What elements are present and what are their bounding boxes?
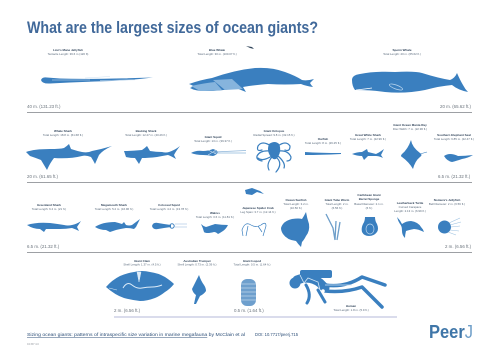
great white shark: Total Length: 7 m. (22.96 ft.) <box>350 137 386 141</box>
scale label: 0.5 m: 0.5 m. (1.64 ft.) <box>234 308 264 313</box>
row 1: largest animals <box>27 46 472 109</box>
giant clam <box>106 259 174 301</box>
southern elephant seal: Total Length: 6.85 m. (22.47 ft.) <box>434 137 474 141</box>
giant squid: Giant Squid <box>205 135 222 139</box>
megamouth shark: Total Length: 5.2 m. (16.96 ft.) <box>95 207 133 211</box>
giant tube worm <box>325 198 350 240</box>
lion's mane jellyfish: Lion's Mane Jellyfish <box>53 48 83 52</box>
leatherback turtle: Leatherback Turtle <box>397 201 424 205</box>
giant isopod <box>234 259 271 306</box>
caribbean giant barrel sponge: Caribbean Giant <box>357 193 381 197</box>
australian trumpet: Australian Trumpet <box>183 259 211 263</box>
southern elephant seal <box>434 133 474 162</box>
giant squid: Total Length: 13 m. (39.37 ft.) <box>194 139 232 143</box>
caribbean giant barrel sponge: (6 ft.) <box>366 206 372 210</box>
blue whale <box>189 46 314 92</box>
giant tube worm: Giant Tube Worm <box>325 198 350 202</box>
lion's mane jellyfish: Tentacle Length: 36.6 m (120 ft) <box>48 52 88 56</box>
giant isopod: Giant Isopod <box>243 259 261 263</box>
row 4 <box>106 259 385 313</box>
caribbean giant barrel sponge: Barrel Sponge <box>359 197 380 201</box>
sperm whale <box>352 48 468 93</box>
japanese spider crab: Japanese Spider Crab <box>242 206 274 210</box>
scale line 1 <box>27 111 472 114</box>
head <box>290 278 300 288</box>
leatherback turtle: Curved Carapace <box>399 205 422 209</box>
nomura's jellyfish <box>429 198 465 235</box>
australian trumpet <box>178 259 216 304</box>
spider crab scale diver <box>245 188 264 195</box>
giant octopus <box>253 129 295 172</box>
caribbean giant barrel sponge <box>354 193 384 236</box>
oarfish: Total Length: 8 m. (26.25 ft.) <box>305 141 341 145</box>
sperm whale: Total Length: 20 m. (65.62 ft.) <box>383 52 421 56</box>
human diver <box>290 270 385 312</box>
australian trumpet: Shell Length: 0.73 m. (2.39 ft.) <box>178 262 216 266</box>
great white shark: Great White Shark <box>355 133 381 137</box>
whale shark: Total Length: 18.8 m. (61.68 ft.) <box>43 133 83 137</box>
row 3 <box>27 188 472 249</box>
leatherback turtle: Length: 2.13 m. (6.99 ft.) <box>394 209 426 213</box>
oarfish: Oarfish <box>318 137 328 141</box>
scale line 3 <box>27 251 472 254</box>
giant ocean manta ray <box>393 123 427 169</box>
blue whale: Total Length: 30 m. (100.07 ft.) <box>197 52 237 56</box>
colossal squid: Colossal Squid <box>158 203 180 207</box>
scale label: 6.5 m left: 6.5 m. (21.32 ft.) <box>27 244 60 249</box>
sperm whale: Sperm Whale <box>392 48 412 52</box>
footnote: CC BY 4.0 <box>27 343 39 346</box>
ocean sunfish: Total Length: 3.2 m. <box>283 202 309 206</box>
tank <box>300 270 332 278</box>
walrus: Total Length: 3.6 m. (11.81 ft.) <box>196 215 234 219</box>
japanese spider crab <box>240 188 276 236</box>
leatherback turtle <box>394 201 426 238</box>
ocean sunfish: (10.50 ft.) <box>290 206 302 210</box>
walrus <box>196 211 234 234</box>
greenland shark: Greenland Shark <box>37 203 61 207</box>
basking shark: Total Length: 12.27 m. (40.26 ft.) <box>125 133 167 137</box>
colossal squid: Total Length: 4.2 m. (13.78 ft.) <box>150 207 188 211</box>
giant ocean manta ray: Giant Ocean Manta Ray <box>393 123 427 127</box>
nomura's jellyfish: Bell Diameter: 2 m. (6.56 ft.) <box>429 202 465 206</box>
megamouth shark <box>95 203 140 232</box>
scale label: 2 m right: 2 m. (6.56 ft.) <box>445 244 472 249</box>
whale shark: Whale Shark <box>54 129 72 133</box>
japanese spider crab: Leg Span: 3.7 m. (12.14 ft.) <box>240 210 276 214</box>
giant clam: Shell Length: 1.37 m. (4.5 ft.) <box>123 262 161 266</box>
giant clam: Giant Clam <box>134 259 150 263</box>
greenland shark: Total Length: 6.4 m. (21 ft.) <box>32 207 66 211</box>
scale label: 2 m: 2 m. (6.56 ft.) <box>114 308 141 313</box>
title: What are the largest sizes of ocean giants? <box>27 18 318 37</box>
giant isopod: Total Length: 0.5 m. (1.64 ft.) <box>234 262 271 266</box>
row 2 <box>26 123 474 179</box>
limbs and torso <box>297 278 325 288</box>
giant tube worm: (6.56 ft.) <box>332 206 342 210</box>
great white shark <box>350 133 386 160</box>
PeerJ logo: PeerJ <box>429 322 473 342</box>
scale label: 20 m right: 20 m. (65.62 ft.) <box>440 104 472 109</box>
citation: Sizing ocean giants: patterns of intraspecific size variation in marine megafauna by McClain et al <box>27 332 245 338</box>
scale line 4 <box>114 316 397 318</box>
scale line 2 <box>27 181 472 184</box>
whale shark <box>26 129 112 170</box>
ocean sunfish <box>281 198 309 247</box>
blue whale: Blue Whale <box>209 48 225 52</box>
small diver scale icon <box>246 46 254 49</box>
megamouth shark: Megamouth Shark <box>101 203 127 207</box>
citation <box>27 332 298 338</box>
basking shark: Basking Shark <box>136 129 157 133</box>
nomura's jellyfish: Nomura's Jellyfish <box>434 198 460 202</box>
southern elephant seal: Southern Elephant Seal <box>437 133 471 137</box>
caribbean giant barrel sponge: Basal Diameter: 2.1 m. <box>354 202 384 206</box>
scale label: 20 m left: 20 m. (61.65 ft.) <box>27 174 59 179</box>
giant octopus: Radial Spread: 9.8 m. (32.15 ft.) <box>253 133 295 137</box>
oarfish <box>305 137 341 155</box>
giant tube worm: Total Length: 2 m. <box>326 202 349 206</box>
human diver: Total Length: 1.8 m. (5.9 ft.) <box>333 308 369 312</box>
scale label: 6.5 m right: 6.5 m. (21.32 ft.) <box>438 174 471 179</box>
walrus: Walrus <box>210 211 220 215</box>
human diver: Human <box>346 304 356 308</box>
ocean sunfish: Ocean Sunfish <box>285 198 307 202</box>
scale label: 40 m: 40 m. (131.23 ft.) <box>27 104 61 109</box>
giant ocean manta ray: Disc Width: 7 m. (22.96 ft.) <box>393 127 427 131</box>
lion's mane jellyfish <box>41 48 153 84</box>
giant octopus: Giant Octopus <box>264 129 285 133</box>
citation: DOI: 10.7717/peerj.715 <box>255 332 298 338</box>
basking shark <box>124 129 180 164</box>
colossal squid <box>150 203 188 229</box>
giant squid <box>191 135 246 156</box>
greenland shark <box>27 203 81 232</box>
